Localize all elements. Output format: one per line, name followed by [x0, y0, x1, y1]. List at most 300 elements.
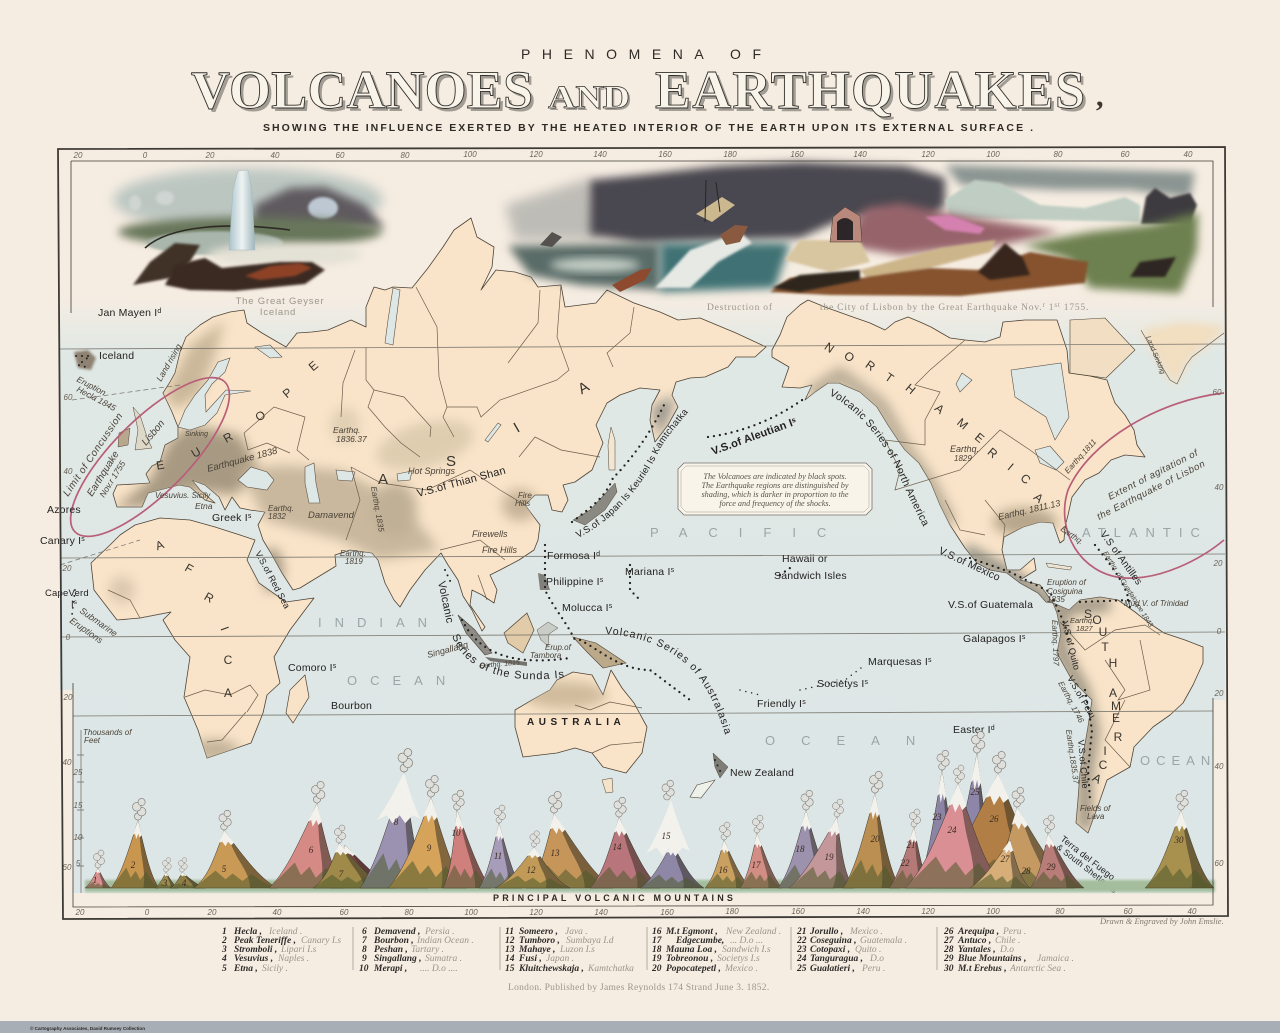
scale numbers: sides: 60 — [63, 863, 72, 872]
legend column 2: Peshan , — [374, 945, 408, 955]
legend column 2: 7 — [362, 936, 368, 946]
legend column 1: Etna , — [233, 964, 258, 974]
mountain 10 Merapi: 10 — [452, 828, 461, 838]
labels: earthquakes: Lisbon — [140, 418, 168, 448]
mountain 20 Popocatepetl — [843, 771, 904, 888]
scale numbers: top: 40 — [1184, 150, 1193, 159]
mountain 29 Blue Mountains: 29 — [1046, 862, 1056, 872]
labels: earthquakes — [61, 335, 1207, 821]
legend column 4: Edgecumbe, — [675, 936, 724, 946]
rivers and borders — [108, 285, 1160, 767]
labels: volcanic series and islands: V.S.of Aleutian I — [710, 417, 795, 458]
scale numbers: bottom: 20 — [75, 908, 85, 917]
Europe letters — [155, 358, 321, 473]
geyser column — [229, 170, 255, 250]
legend column 6: Peru . — [1002, 927, 1026, 937]
labels: earthquakes: Sinking — [185, 431, 208, 438]
legend column 5: 24 — [796, 954, 807, 964]
labels: earthquakes: Land Sinking — [1144, 335, 1166, 375]
stormy sea left — [508, 243, 660, 290]
legend column 1: Vesuvius , — [234, 954, 273, 964]
legend column 5: 25 — [796, 964, 807, 974]
labels: volcanic series and islands: s — [248, 513, 252, 520]
North America letters: R — [985, 445, 1001, 461]
labels: volcanic series and islands: Comoro I — [288, 662, 333, 674]
letters: continents — [153, 340, 1123, 787]
legend column 6: M.t Erebus , — [957, 964, 1007, 974]
scale numbers: top: 20 — [73, 151, 83, 160]
labels: earthquakes: 1836.37 — [336, 434, 367, 444]
labels: volcanic series and islands: s — [865, 679, 869, 686]
height scale — [77, 730, 84, 893]
foam — [207, 243, 363, 267]
ruin rubble — [785, 240, 870, 272]
legend column 5: Quito . — [855, 945, 881, 955]
mountain 15 Kluitchewskaja — [640, 780, 704, 888]
labels: volcanic series and islands: V.S of Antilles — [1098, 529, 1144, 587]
mountain 30 Mt Erebus: 30 — [1174, 835, 1184, 845]
mountain 18 Mauna Loa — [778, 790, 835, 888]
labels: volcanic series and islands: V.S.of Thian Shan — [416, 465, 507, 500]
North America letters: A — [932, 401, 947, 417]
labels: volcanic series and islands: V.S.of Guatemala — [948, 599, 1033, 611]
panel: vignette Great Geyser — [113, 168, 385, 318]
scale numbers: bottom: 160 — [660, 908, 674, 917]
labels: volcanic series and islands: s — [928, 657, 932, 664]
pink highlight — [925, 215, 985, 234]
Asia letters: A — [575, 378, 592, 398]
labels: volcanic series and islands: Philippine I — [546, 576, 600, 588]
distant hills — [945, 180, 1140, 222]
legend column 2: Demavend , — [373, 927, 420, 937]
rock foreground dark — [165, 258, 325, 291]
geyser plain — [118, 217, 382, 247]
legend column 3: 15 — [505, 964, 515, 974]
labels: earthquakes: 1827 — [1076, 624, 1094, 633]
steam cloud — [308, 197, 338, 219]
labels: volcanic series and islands: d — [991, 725, 995, 732]
mountain 26 Arequipa — [926, 751, 1065, 888]
labels: earthquakes: Fire Hills — [482, 545, 517, 555]
mountain 23 Cotopaxi — [917, 750, 966, 888]
legend column 3: Someero , — [519, 927, 558, 937]
labels: earthquakes: Hecla 1845 — [75, 384, 118, 413]
legend column 1: Canary I.s — [301, 936, 341, 946]
title line: Phenomena of: PHENOMENA OF — [521, 46, 761, 62]
scale numbers: top: 60 — [336, 151, 345, 160]
labels: earthquakes: Submarine — [78, 605, 119, 639]
mountain 3 Stromboli — [154, 858, 178, 888]
labels: earthquakes: Earthq. — [340, 549, 366, 558]
mountain 6 Demavend — [269, 781, 355, 888]
legend column 5: Gualatieri , — [810, 964, 855, 974]
legend column 4: Sandwich I.s — [722, 945, 771, 955]
mountain 19 Tobreonou: 19 — [824, 852, 834, 862]
scale numbers: top: 80 — [401, 151, 410, 160]
labels: volcanic series and islands: Volcanic — [435, 580, 456, 625]
legend column 3: Java . — [565, 927, 588, 937]
labels: earthquakes: the Earthquake of Lisbon — [1095, 458, 1207, 523]
labels: volcanic series and islands: Friendly I — [757, 698, 802, 710]
ocean names: PACIFIC — [650, 525, 847, 540]
labels: volcanic series and islands: Societys I — [817, 678, 865, 690]
legend column 1: Lipari I.s — [280, 945, 317, 955]
labels: volcanic series and islands: Jan Mayen I — [98, 307, 157, 319]
scale numbers: bottom: 120 — [921, 907, 935, 916]
scale numbers: bottom: 60 — [1124, 907, 1133, 916]
scale numbers: bottom — [75, 907, 1197, 917]
subtitle: SHOWING THE INFLUENCE EXERTED BY THE HEATED INTERIOR OF THE EARTH UPON ITS EXTERNAL SURFACE . — [263, 122, 1033, 134]
mountain 6b shoulder — [312, 845, 395, 888]
dark rock foreground — [1130, 257, 1176, 277]
legend column 5: Coseguina , — [810, 936, 856, 946]
scale numbers: bottom: 100 — [464, 908, 478, 917]
geyser sky — [113, 168, 383, 232]
Africa letters: C — [224, 653, 233, 667]
legend column 3: Mahaye , — [518, 945, 555, 955]
South America letters: S — [1084, 607, 1092, 621]
legend column 6: 29 — [943, 954, 954, 964]
mountain 29 Blue Mountains — [1021, 815, 1084, 888]
scale numbers: bottom: 0 — [145, 908, 150, 917]
Lisbon caption continued: 1755. — [1061, 303, 1089, 313]
labels: earthquakes: 1819 — [345, 557, 363, 566]
labels: earthquakes: Fire — [518, 491, 532, 500]
legend column 6: D.o — [999, 945, 1014, 955]
limit lines — [60, 385, 180, 565]
labels: volcanic series and islands: Canary I — [40, 535, 81, 547]
mountain 10 Merapi — [433, 790, 491, 888]
ocean names: INDIAN — [318, 615, 440, 630]
ocean names: OCEAN — [347, 673, 458, 688]
labels: earthquakes: Eruptions — [68, 615, 105, 646]
legend column 4: M.t Egmont , — [665, 927, 718, 937]
South America letters: I — [1103, 744, 1107, 758]
mountain 5 Etna: 5 — [222, 864, 227, 874]
stormy sea right — [660, 243, 790, 292]
scale numbers: bottom: 180 — [725, 907, 739, 916]
labels: volcanic series and islands: s — [333, 663, 337, 670]
wreck hull — [720, 225, 748, 245]
scale numbers: sides: 40 — [1215, 762, 1224, 771]
geyser mountain — [255, 187, 385, 230]
Lisbon caption continued: r — [1042, 301, 1046, 309]
ocean names: OCEAN — [1140, 753, 1216, 768]
scale numbers: sides: 0 — [66, 633, 71, 642]
labels: volcanic series and islands: Greek I — [212, 512, 248, 524]
mountain 11 Someero — [478, 805, 522, 888]
legend column 5: Guatemala . — [860, 936, 907, 946]
North America letters: T — [882, 370, 897, 386]
mountains caption: PRINCIPAL VOLCANIC MOUNTAINS — [493, 893, 736, 903]
labels: earthquakes: Nov.r 1755 — [97, 459, 128, 499]
South America letters — [1084, 607, 1123, 787]
title: and: AND — [548, 80, 630, 116]
Africa letters: I — [218, 625, 232, 633]
scale numbers: top: 100 — [986, 150, 1000, 159]
mountain 4 Vesuvius: 4 — [182, 878, 187, 888]
North America letters: M — [954, 415, 971, 433]
legend column 4: New Zealand . — [725, 927, 781, 937]
Greenland and Baffin tint — [1070, 318, 1224, 384]
labels: earthquakes: 1832 — [268, 512, 286, 521]
legend column 1: 1 — [222, 927, 227, 937]
legend column 1: 5 — [222, 964, 227, 974]
labels: volcanic series and islands: Azores — [47, 504, 81, 516]
mountain 4 Vesuvius — [164, 858, 205, 888]
legend column 6: Chile . — [995, 936, 1020, 946]
mountain 28 Yantales: 28 — [1022, 866, 1031, 876]
North America letters — [822, 340, 1046, 506]
labels: earthquakes: Earthq. of Guadaloupe 1843 — [1101, 550, 1154, 629]
labels: earthquakes: Earthquake — [85, 449, 122, 499]
rock foreground red — [245, 263, 312, 280]
labels: earthquakes: Earthq. 1835 — [369, 486, 386, 533]
mountain 15 Kluitchewskaja: 15 — [662, 831, 671, 841]
callout: explanation box — [678, 463, 872, 515]
mountain 9 Singallang: 9 — [427, 843, 432, 853]
pink agitation ellipse: Atlantic — [1065, 393, 1224, 578]
mountain 21 Jorullo: 21 — [906, 840, 916, 850]
legend column 2: 8 — [362, 945, 367, 955]
mountain 14 Fusi: 14 — [612, 842, 622, 852]
scale numbers: bottom: 60 — [340, 908, 349, 917]
Asia letters — [378, 378, 592, 488]
mountain 7 Bourbon — [302, 825, 388, 888]
scale numbers: sides — [62, 388, 1224, 872]
landmasses — [91, 218, 1203, 833]
legend column 1: 3 — [221, 945, 227, 955]
ship — [696, 180, 735, 222]
labels: earthquakes: Feet — [84, 736, 101, 745]
rock left — [133, 243, 200, 285]
scale numbers: bottom: 40 — [1188, 907, 1197, 916]
labels: volcanic series and islands: V.S.of Chile — [1076, 739, 1090, 789]
scale numbers: sides: 60 — [1213, 388, 1222, 397]
mountain 25 Gualatieri — [944, 731, 1005, 888]
labels: volcanic series and islands: Terra del Fuego — [1059, 834, 1117, 882]
legend column 4: Mexico . — [724, 964, 758, 974]
South America letters: U — [1099, 625, 1107, 639]
steam jets — [129, 191, 174, 211]
wreck boat — [612, 268, 652, 292]
legend column 2: Tartary . — [411, 945, 444, 955]
scale numbers: top: 120 — [529, 150, 543, 159]
title: Volcanoes: VOLCANOES — [194, 63, 536, 123]
labels: earthquakes: Firewells — [472, 529, 508, 539]
publisher line: London. Published by James Reynolds 174 Strand June 3. 1852. — [508, 983, 770, 993]
legend dividers — [353, 927, 937, 970]
ocean names: ATLANTIC — [1082, 525, 1208, 540]
labels: earthquakes: Singallang — [426, 639, 469, 660]
legend column 3: 13 — [505, 945, 515, 955]
legend column 1: Naples . — [277, 954, 309, 964]
New Guinea and islands — [74, 350, 1072, 798]
far sky — [945, 165, 1195, 198]
legend column 3: Luzon I.s — [559, 945, 595, 955]
legend column 5: Mexico . — [849, 927, 883, 937]
legend column 6: 26 — [943, 927, 954, 937]
labels: volcanic series and islands: Sandwich Isles — [774, 570, 847, 582]
labels: earthquakes: Hot Springs — [408, 466, 456, 476]
scale numbers: top: 140 — [853, 150, 867, 159]
22 small peak label: 22 — [900, 858, 910, 868]
labels: earthquakes: Earthquake 1838 — [206, 445, 279, 475]
title: and: AND — [550, 82, 632, 118]
Europe letters: E — [155, 457, 165, 473]
mountain 17 Edgecumbe — [736, 815, 782, 888]
South America letters: R — [1114, 730, 1123, 744]
legend column 4: Mauna Loa , — [665, 945, 717, 955]
mountain 23 Cotopaxi: 23 — [932, 812, 942, 822]
panel: world map — [40, 218, 1225, 895]
labels: earthquakes: Earthq. — [268, 504, 294, 513]
legend column 3: 12 — [505, 936, 515, 946]
mountain 3 Stromboli: 3 — [162, 878, 168, 888]
labels: volcanic series and islands: V.S of Quito — [1060, 620, 1082, 671]
mountain 26 Arequipa: 26 — [990, 814, 999, 824]
callout: explanation box: The Volcanoes are indicated by black spots. — [703, 472, 847, 481]
scale numbers: bottom: 80 — [405, 908, 414, 917]
labels: earthquakes: Earthq. — [1059, 524, 1085, 546]
legend column 3: 11 — [505, 927, 514, 937]
legend column 2: Persia . — [424, 927, 455, 937]
labels: volcanic series and islands: Molucca I — [562, 602, 609, 614]
geyser caption — [236, 296, 324, 318]
labels: earthquakes: Mud V. of Trinidad — [1124, 599, 1189, 608]
labels: earthquakes: Erup.of — [545, 643, 572, 652]
mountain 17 Edgecumbe: 17 — [752, 860, 761, 870]
labels: earthquakes: Earthq.1811 — [1063, 437, 1098, 475]
North America letters: H — [903, 381, 918, 397]
legend column 5: Cotopaxi , — [810, 945, 850, 955]
legend column 3: Japan . — [546, 954, 574, 964]
Europe letters: P — [280, 385, 295, 401]
scale numbers: top: 40 — [271, 151, 280, 160]
legend column 5: 21 — [796, 927, 806, 937]
Lisbon caption: Destruction of — [707, 302, 773, 313]
scale numbers: top: 120 — [921, 150, 935, 159]
mountain 13 Mahaye — [510, 791, 613, 888]
labels: volcanic series and islands: s — [802, 699, 806, 706]
legend column 5: 23 — [796, 945, 807, 955]
labels: volcanic series and islands: Bourbon — [331, 700, 372, 712]
Africa letters — [153, 537, 233, 700]
legend column 5: Peru . — [861, 964, 885, 974]
callout: explanation box: shading, which is darker in proportion to the — [701, 490, 849, 499]
labels: volcanic series and islands: V.S.of Mexico — [937, 545, 1002, 584]
mountain 1 Hecla — [85, 850, 111, 888]
legend column 5 — [796, 927, 907, 974]
scale numbers: bottom: 140 — [856, 907, 870, 916]
pool rim — [145, 226, 290, 248]
dark shore — [772, 270, 860, 292]
legend column 6: Yantales , — [958, 945, 996, 955]
scale numbers: sides: 10 — [74, 833, 83, 842]
legend column 1: Iceland . — [268, 927, 302, 937]
scale numbers: top: 60 — [1121, 150, 1130, 159]
North America letters: O — [841, 348, 857, 365]
panel: principal volcanic mountains — [77, 730, 1216, 903]
legend column 1: Sicily . — [262, 964, 288, 974]
pink agitation ellipse: Europe — [49, 356, 251, 558]
scale numbers: top — [73, 150, 1193, 160]
tan road — [860, 240, 996, 282]
geyser caption: Iceland — [260, 307, 296, 318]
hot pool — [147, 231, 283, 255]
legend column 2: 10 — [359, 964, 369, 974]
labels: volcanic series and islands: Formosa I — [547, 550, 596, 562]
mountain 24 Tanguragua — [905, 765, 1008, 888]
labels: earthquakes: Hills — [515, 499, 530, 508]
mountain 9 Singallang — [388, 775, 470, 888]
labels: earthquakes: Earthq. — [333, 425, 360, 435]
labels: volcanic series and islands: New Zealand — [730, 767, 794, 779]
labels: earthquakes: Eruption of — [1047, 578, 1086, 587]
curved label: Australasia: Volcanic Series of Australasia — [606, 626, 730, 735]
legend column 4: ... D.o ... — [730, 936, 763, 946]
Asia letters: I — [511, 420, 523, 437]
legend column 3: Sumbaya I.d — [566, 936, 614, 946]
legend column 4: 18 — [652, 945, 662, 955]
distant ship — [540, 232, 562, 247]
South America letters: A — [1090, 770, 1104, 787]
legend column 1: 4 — [221, 954, 227, 964]
labels: volcanic series and islands: s — [791, 417, 797, 425]
legend column 2: Singallang , — [374, 954, 422, 964]
callout: explanation box: force and frequency of the shocks. — [719, 499, 831, 508]
scale numbers: bottom: 80 — [1056, 907, 1065, 916]
mountain 14 Fusi — [584, 797, 660, 888]
legend column 2: 6 — [362, 927, 367, 937]
legend column 3 — [505, 927, 634, 974]
South America letters: A — [1109, 686, 1117, 700]
legend column 6 — [943, 927, 1074, 974]
legend column 5: Jorullo , — [809, 927, 843, 937]
mountain 8 Peshan: 8 — [394, 817, 399, 827]
labels: volcanic series and islands: s — [609, 603, 613, 610]
legend column 5: D.o — [869, 954, 884, 964]
mountain 20 Popocatepetl: 20 — [870, 834, 880, 844]
mountain 18 Mauna Loa: 18 — [796, 844, 805, 854]
labels: volcanic series and islands: d — [596, 551, 600, 558]
scale numbers: top: 180 — [723, 150, 737, 159]
labels: volcanic series and islands: Iceland — [99, 350, 134, 362]
labels: earthquakes: Earthq. 1811.13 — [997, 498, 1061, 522]
frame — [58, 147, 1228, 919]
labels: earthquakes: 1835 — [1047, 595, 1065, 604]
mountain 16 Mt Egmont — [701, 822, 751, 888]
labels: earthquakes: Earthq. 1797 — [1050, 620, 1061, 666]
Lisbon caption continued: the City of Lisbon by the Great Earthquake Nov. — [820, 303, 1042, 313]
legend column 2: Bourbon , — [373, 936, 414, 946]
South America letters: E — [1112, 711, 1120, 725]
ocean names — [318, 525, 1216, 768]
legend column 2: Merapi , — [373, 964, 407, 974]
mountain 7 Bourbon: 7 — [339, 869, 344, 879]
South America letters: O — [1092, 613, 1102, 627]
mountain 25 Gualatieri: 25 — [970, 787, 980, 797]
North America letters: I — [1005, 460, 1016, 473]
labels: volcanic series and islands: s — [671, 567, 675, 574]
Europe letters: O — [252, 408, 269, 424]
mountain 13 Mahaye: 13 — [550, 848, 560, 858]
labels: earthquakes: Fields of — [1080, 804, 1111, 813]
scale numbers: top: 20 — [205, 151, 215, 160]
mountain 5 Etna — [182, 810, 277, 888]
scale numbers: top: 80 — [1054, 150, 1063, 159]
labels: earthquakes: Eruption — [75, 374, 108, 398]
